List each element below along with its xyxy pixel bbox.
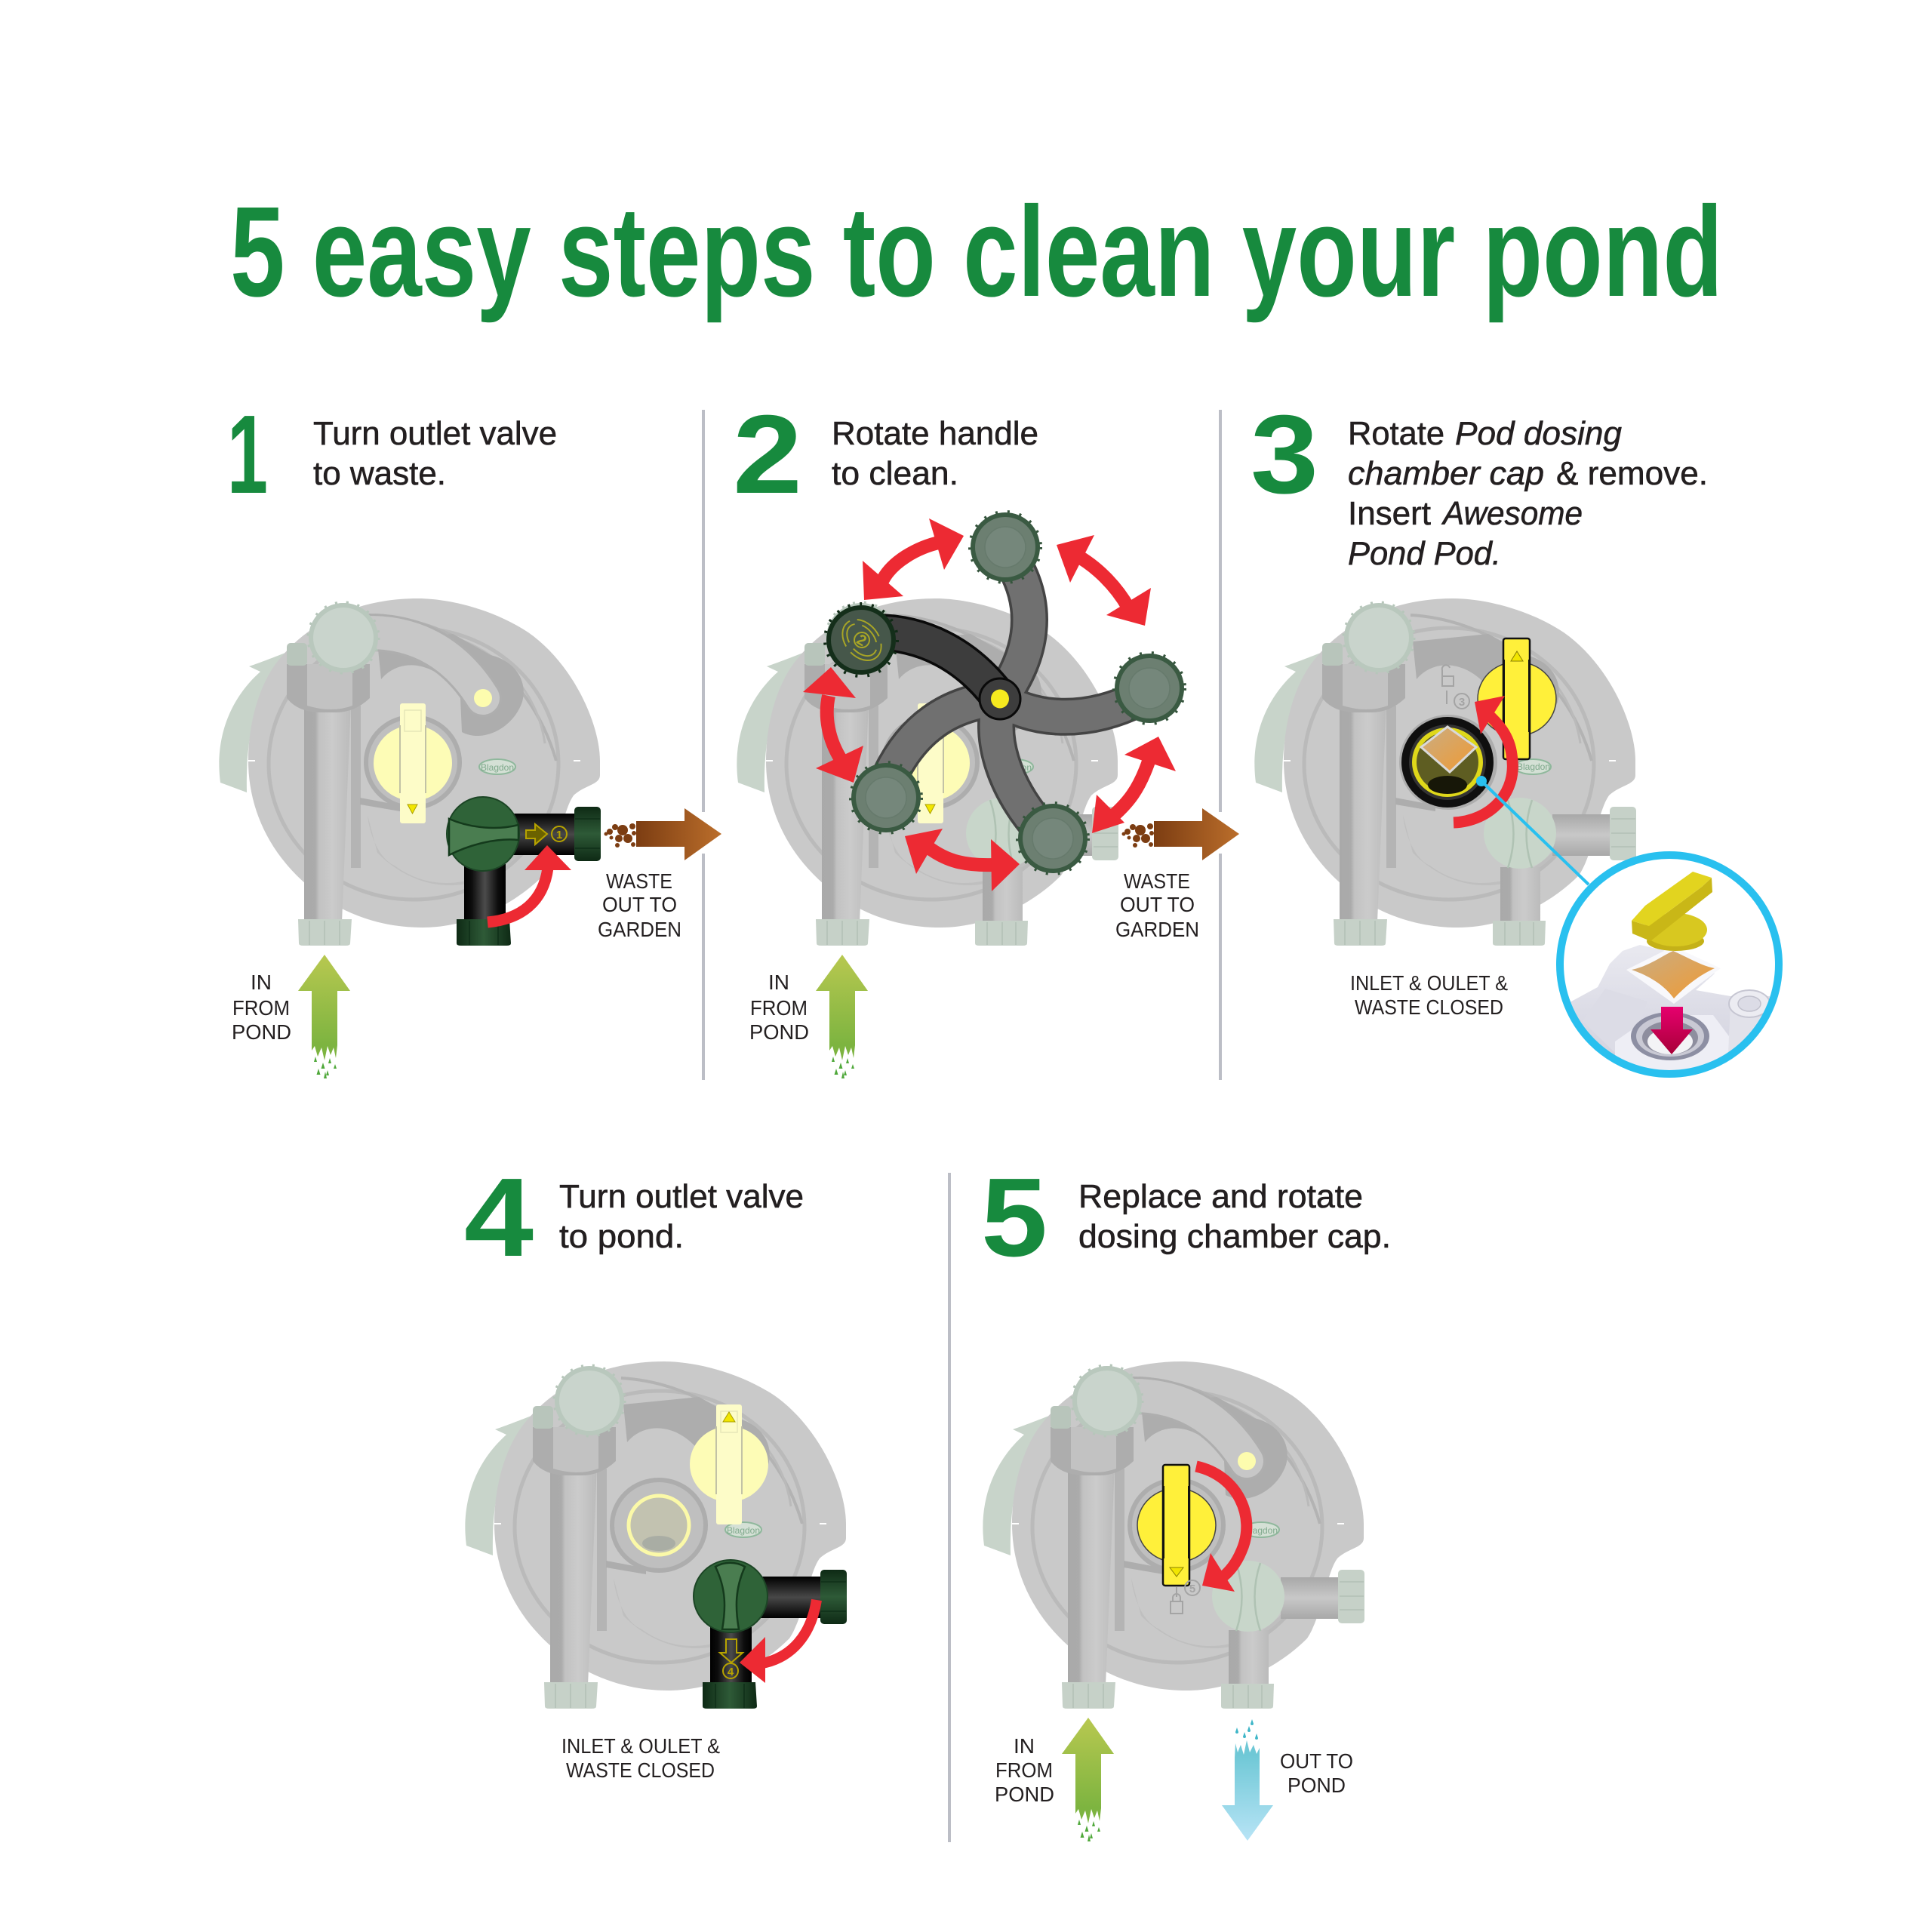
rotating handle positions: 2 xyxy=(854,632,869,650)
pump illustration: Blagdon xyxy=(1517,761,1550,772)
waste label: WASTE xyxy=(606,869,672,893)
pump illustration xyxy=(465,1361,847,1709)
step 2 instruction: Rotate handle xyxy=(832,415,1038,452)
closed label: WASTE CLOSED xyxy=(566,1758,715,1782)
circled 3: 3 xyxy=(1459,696,1465,709)
waste label: GARDEN xyxy=(598,918,681,941)
step number 3: 3 xyxy=(1251,392,1318,517)
closed label: WASTE CLOSED xyxy=(1355,995,1503,1019)
inflow label xyxy=(232,971,291,1044)
green inflow arrow xyxy=(816,955,868,1078)
waste label: OUT TO xyxy=(602,893,677,916)
closed label: INLET & OULET & xyxy=(561,1734,720,1758)
inflow label: IN xyxy=(251,971,272,994)
waste out arrow xyxy=(604,808,721,860)
step number 1: 1 xyxy=(227,392,268,517)
pump illustration: Blagdon xyxy=(727,1525,760,1536)
circled 5: 5 xyxy=(1189,1583,1195,1595)
green inflow arrow xyxy=(1062,1718,1114,1841)
blue outflow arrow xyxy=(1222,1719,1273,1841)
inflow label: IN xyxy=(768,971,789,994)
step 5 instruction xyxy=(1078,1178,1391,1255)
step 3 instruction: chamber cap xyxy=(1348,455,1544,492)
pump illustration: Blagdon xyxy=(481,762,514,773)
step 2 instruction: to clean. xyxy=(832,455,958,492)
waste out arrow xyxy=(1121,808,1239,860)
inflow label: POND xyxy=(995,1783,1054,1806)
inflow label: POND xyxy=(232,1020,291,1044)
step 4 instruction xyxy=(559,1178,804,1255)
step 2 instruction xyxy=(832,415,1038,492)
step 3 instruction: Rotate xyxy=(1348,415,1444,452)
pump illustration xyxy=(983,1361,1364,1709)
red arrow: turn valve xyxy=(488,845,571,922)
waste label xyxy=(598,869,681,941)
pump illustration: 1 xyxy=(556,829,562,841)
step 4 instruction: to pond. xyxy=(559,1218,684,1255)
panel: step 3 xyxy=(1251,392,1779,1079)
pump illustration: Blagdon xyxy=(998,762,1032,773)
red double arrows xyxy=(803,518,1176,891)
step 4 instruction: Turn outlet valve xyxy=(559,1178,804,1215)
step 1 instruction xyxy=(313,415,557,492)
waste label xyxy=(1115,869,1199,941)
waste label: GARDEN xyxy=(1115,918,1199,941)
step number 5: 5 xyxy=(981,1155,1048,1280)
step 5 instruction: Replace and rotate xyxy=(1078,1178,1363,1215)
lock marker xyxy=(1171,1580,1200,1614)
rotating handle positions xyxy=(825,512,1185,874)
green inflow arrow xyxy=(298,955,350,1078)
step number 2: 2 xyxy=(733,392,802,517)
red arrow: rotate cap xyxy=(1454,696,1512,823)
step 3 instruction xyxy=(1348,415,1708,572)
step 5 instruction: dosing chamber cap. xyxy=(1078,1218,1391,1255)
step 3 instruction: & remove. xyxy=(1556,455,1708,492)
pump illustration xyxy=(737,598,1118,946)
closed label xyxy=(561,1734,720,1782)
lock marker xyxy=(1442,665,1469,709)
inflow label xyxy=(749,971,809,1044)
inflow label: IN xyxy=(1014,1734,1035,1758)
inset pointer line xyxy=(1476,776,1589,884)
pump illustration xyxy=(219,598,601,946)
red arrow: rotate cap xyxy=(1196,1466,1247,1592)
inflow label: FROM xyxy=(750,996,808,1020)
panel: step 4 xyxy=(464,1155,847,1782)
inflow label: FROM xyxy=(232,996,290,1020)
panel: step 1 xyxy=(219,392,721,1078)
waste label: OUT TO xyxy=(1120,893,1195,916)
pump illustration: Blagdon xyxy=(1244,1525,1278,1536)
step number 4: 4 xyxy=(464,1155,534,1280)
outflow label: POND xyxy=(1287,1774,1346,1797)
pump illustration: 4 xyxy=(728,1666,734,1678)
step 1 instruction: to waste. xyxy=(313,455,446,492)
red arrow: turn valve xyxy=(740,1600,817,1683)
panel: step 2 xyxy=(733,392,1239,1078)
inflow label xyxy=(995,1734,1054,1806)
step 3 instruction: Pond Pod. xyxy=(1348,535,1501,572)
outflow label: OUT TO xyxy=(1280,1749,1353,1773)
outflow label xyxy=(1280,1749,1353,1797)
closed label xyxy=(1350,971,1508,1019)
step 3 instruction: Awesome xyxy=(1441,495,1583,532)
inflow label: FROM xyxy=(995,1758,1053,1782)
pump illustration xyxy=(1254,598,1636,946)
step 3 instruction: Insert xyxy=(1348,495,1431,532)
open dosing chamber with pod xyxy=(1401,717,1494,808)
step 1 instruction: Turn outlet valve xyxy=(313,415,557,452)
inflow label: POND xyxy=(749,1020,809,1044)
inset: inserting pod xyxy=(1560,855,1779,1079)
step 3 instruction: Pod dosing xyxy=(1455,415,1623,452)
closed label: INLET & OULET & xyxy=(1350,971,1508,995)
panel: step 5 xyxy=(981,1155,1391,1841)
waste label: WASTE xyxy=(1124,869,1190,893)
